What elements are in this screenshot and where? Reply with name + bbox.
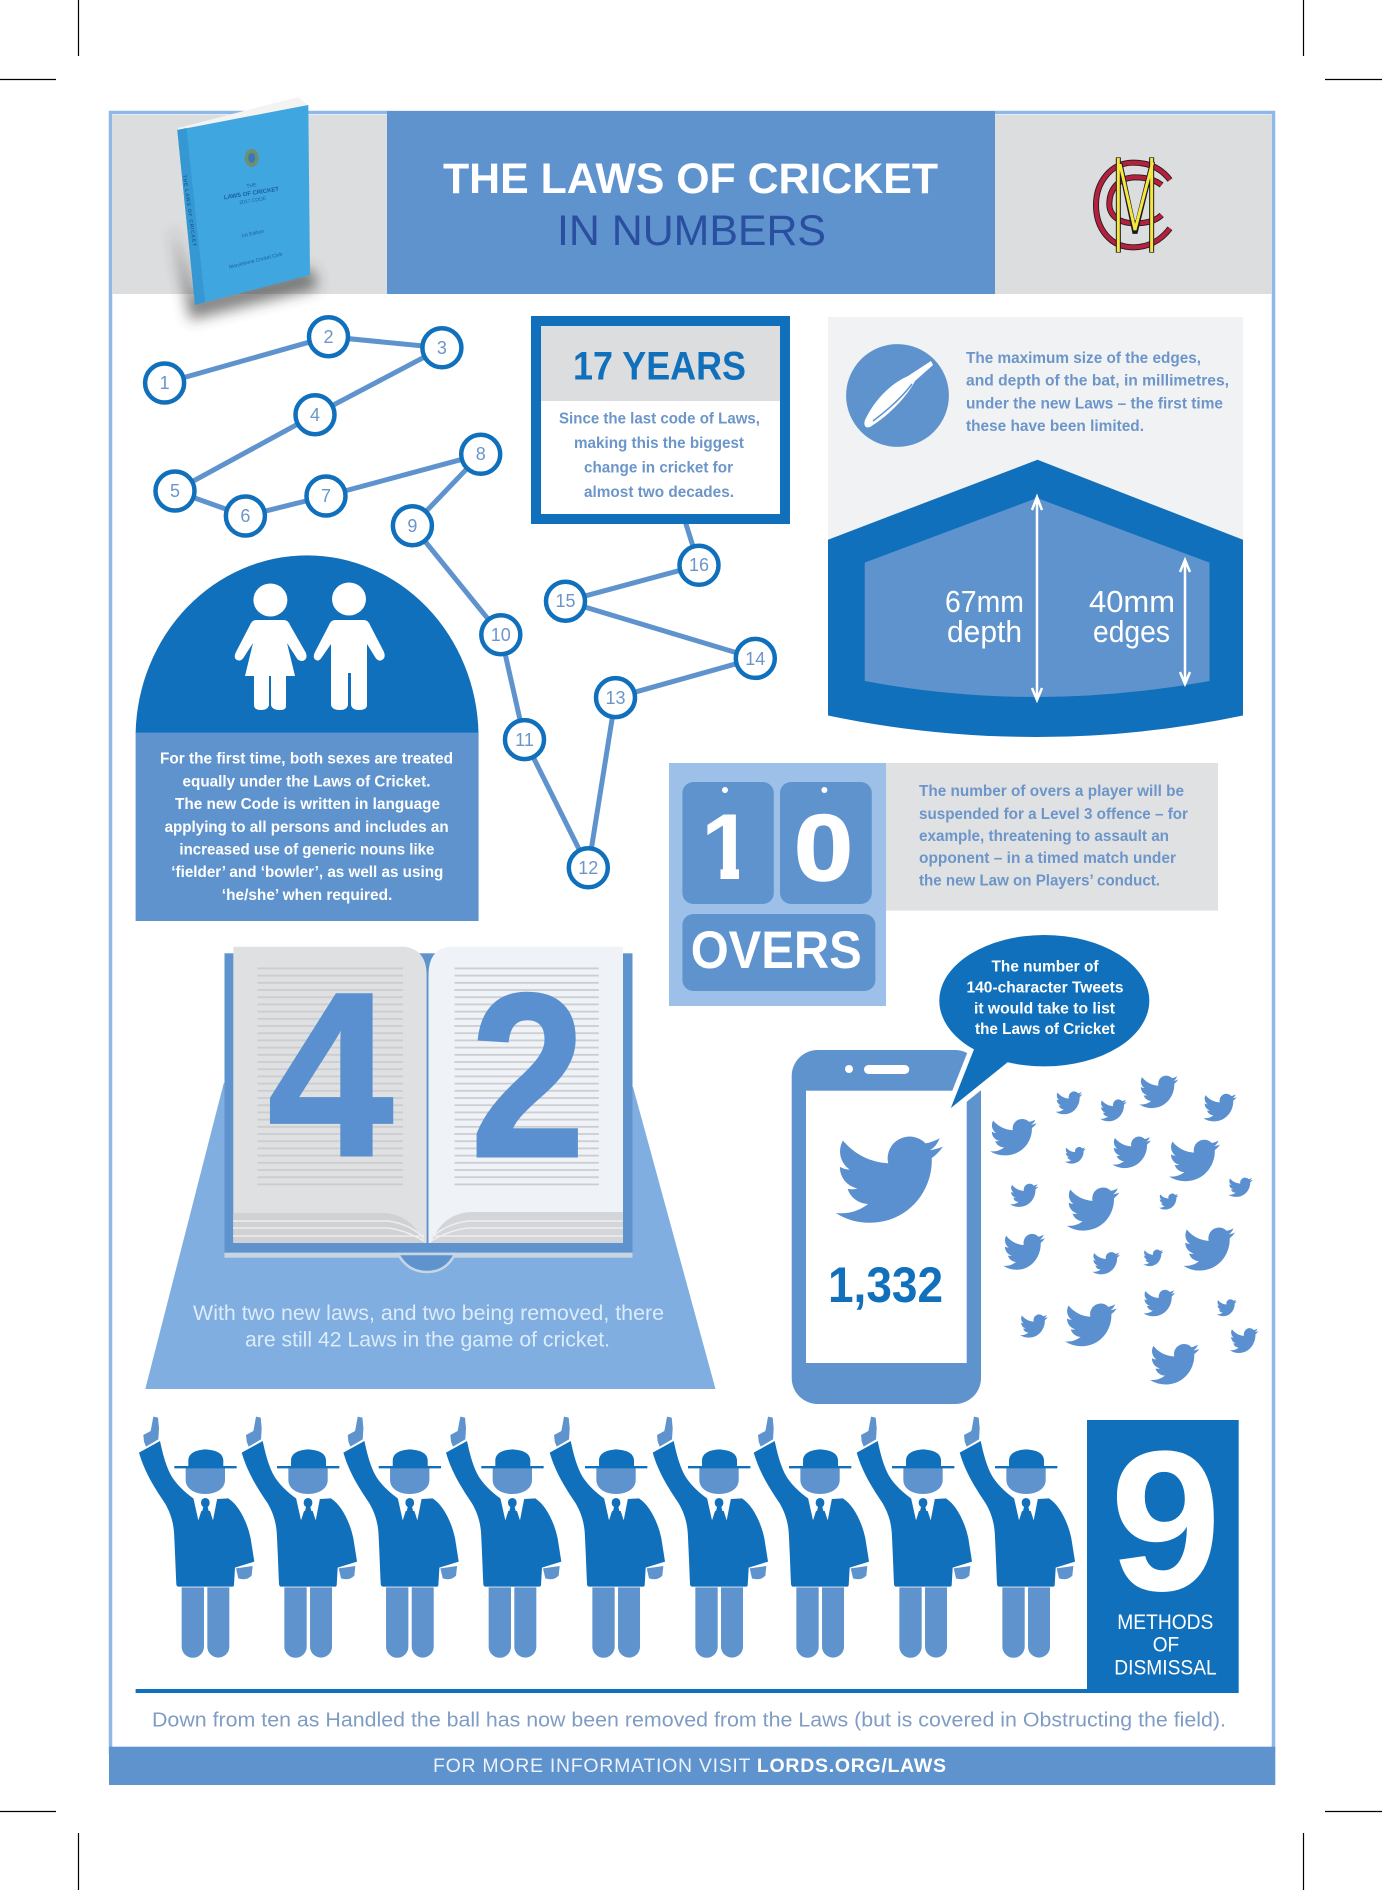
flock of twitter birds [990,1076,1258,1384]
node 6: 6 [240,506,250,526]
umpire 5 [550,1417,665,1658]
bat cross-section outer [828,460,1243,737]
description: For the first time, both sexes are treated [160,751,453,768]
icon: laws book cover: THE [246,182,258,190]
panel: equality [136,555,479,921]
grey text background [886,763,1218,911]
panel: 10 overs [669,763,1218,1006]
node 2: 2 [323,327,334,347]
node 13 [596,678,635,717]
label: 67mm depth: depth [947,614,1022,649]
icon: bat [846,344,949,447]
description: and depth of the bat, in millimetres, [966,372,1229,390]
description: equally under the Laws of Cricket. [182,773,430,790]
icon: phone [792,1050,981,1404]
node 14: 14 [745,649,765,669]
speech bubble [939,935,1149,1116]
speech bubble: 140-character Tweets [966,980,1124,997]
node 13: 13 [605,688,626,708]
node 3 [422,328,461,367]
description: under the new Laws – the first time [966,396,1223,412]
rule [136,1689,1088,1693]
panel: 17 years [536,321,785,519]
node 16: 16 [689,555,709,575]
description: The new Code is written in language [175,796,440,813]
node 9: 9 [407,516,417,536]
box [536,321,785,519]
label: 67mm depth: 67mm [945,584,1024,619]
scoreboard tile 0: 0 [794,795,853,900]
node 11 [505,720,544,759]
speech bubble: it would take to list [974,1000,1116,1017]
page stacks [233,1213,424,1243]
scoreboard tile 1: 1 [701,794,753,899]
node 15 [546,582,585,621]
arrow: depth [1032,497,1042,700]
node 16 [680,546,718,585]
node 10 [481,615,520,654]
label [1114,1611,1217,1679]
umpire 2 [242,1417,357,1658]
label: 40mm edges: edges [1093,614,1170,649]
node 9 [393,506,432,545]
label: DISMISSAL [1114,1656,1217,1679]
description: change in cricket for [584,460,733,477]
icon: laws book cover: THE LAWS OF CRICKET [181,174,197,247]
icon: laws book cover: 2017 CODE [239,196,267,206]
scoreboard tile 1 [682,782,774,904]
caption: With two new laws, and two being removed, there [193,1301,664,1325]
number 42: 2 [471,946,585,1206]
text panel [136,733,479,921]
scoreboard tile 0 [780,782,872,904]
label: 40mm edges: 40mm [1089,584,1175,619]
header blue title panel [387,111,995,294]
trapezoid backdrop [145,1083,716,1389]
number 42 [268,945,585,1206]
node 11: 11 [515,730,534,750]
umpire 8 [857,1417,972,1658]
caption: are still 42 Laws in the game of cricket. [245,1328,610,1352]
icon: laws book cover [172,97,318,320]
dismissal note: Down from ten as Handled the ball has now been removed from the Laws (but is covered in Obstructing the field). [152,1710,1226,1732]
umpire 4 [446,1417,561,1658]
light blue background [669,763,886,1006]
node 10: 10 [491,625,511,645]
node 8: 8 [476,444,486,464]
icon: large twitter bird [836,1137,943,1223]
node 7: 7 [321,486,331,506]
description: almost two decades. [584,484,734,501]
umpire 1 [139,1417,254,1658]
description: The maximum size of the edges, [966,350,1201,367]
description: The number of overs a player will be [919,783,1184,800]
label: 67mm depth [945,584,1024,649]
panel: 9 methods of dismissal [136,1410,1239,1693]
footer bar [109,1747,1275,1785]
page text lines [257,968,403,1188]
number 42: 4 [268,945,393,1205]
page frame [110,112,1274,1752]
panel: 42 laws [145,945,716,1389]
row of nine umpires [139,1417,1075,1658]
label: 40mm edges [1089,584,1175,649]
umpire 9 [960,1417,1075,1658]
speech bubble: The number of [992,959,1099,976]
panel background [828,317,1243,557]
node 1: 1 [160,373,170,393]
left page [233,947,427,1243]
node 5: 5 [170,481,180,501]
number 9: 9 [1110,1410,1221,1633]
icon: MCC logo [1096,157,1170,253]
description: these have been limited. [966,418,1144,435]
node 14 [736,639,775,678]
subtitle: IN NUMBERS [557,207,826,255]
description: opponent – in a timed match under [919,850,1176,867]
label: METHODS [1117,1611,1213,1634]
node 3: 3 [437,338,447,358]
numbered path of new laws [145,317,775,887]
panel: bat dimensions [828,317,1243,737]
umpire 3 [343,1417,459,1658]
description: ‘fielder’ and ‘bowler’, as well as using [171,864,443,881]
icon: laws book cover: 1st Edition [241,229,265,239]
title: THE LAWS OF CRICKET [443,155,938,203]
dome [136,555,478,733]
description: suspended for a Level 3 offence – for [919,806,1188,823]
header grey background [112,115,1272,294]
label: OF [1153,1634,1179,1657]
node 4: 4 [310,405,320,425]
node 1 [145,364,184,402]
bat cross-section inner [865,498,1210,697]
node 4 [296,395,334,434]
book cover [224,953,632,1272]
arrow: edges [1180,560,1190,684]
node 12 [569,848,608,887]
description: the new Law on Players’ conduct. [919,872,1160,889]
description: applying to all persons and includes an [165,819,449,836]
heading: 17 YEARS [573,345,746,389]
description: ‘he/she’ when required. [222,887,392,904]
node 8 [461,435,500,474]
icon: boy [314,582,385,710]
node 2 [309,317,348,356]
description: Since the last code of Laws, [559,410,760,428]
description: increased use of generic nouns like [179,842,434,858]
description: example, threatening to assault an [919,828,1169,845]
node 6 [226,496,265,536]
node 15: 15 [555,591,576,611]
node 12: 12 [578,858,598,878]
description: making this the biggest [574,435,744,452]
connector lines [165,337,755,868]
speech bubble: the Laws of Cricket [975,1021,1116,1038]
header band [112,111,1272,294]
icon: laws book cover: LAWS OF CRICKET [224,187,280,201]
tweet count: 1,332 [828,1257,943,1313]
blue box [1087,1420,1239,1693]
panel: tweets [792,935,1258,1404]
icon: laws book cover: Marylebone Cricket Club [228,251,283,271]
overs label: OVERS [691,921,862,980]
grey heading background [541,326,780,401]
footer text: FOR MORE INFORMATION VISIT LORDS.ORG/LAWS [433,1755,946,1777]
umpire 7 [754,1417,869,1658]
node 7 [306,476,346,516]
caption [193,1301,664,1352]
umpire 6 [653,1417,768,1658]
node 5 [156,472,194,510]
icon: girl [235,584,306,710]
right page [428,947,623,1243]
